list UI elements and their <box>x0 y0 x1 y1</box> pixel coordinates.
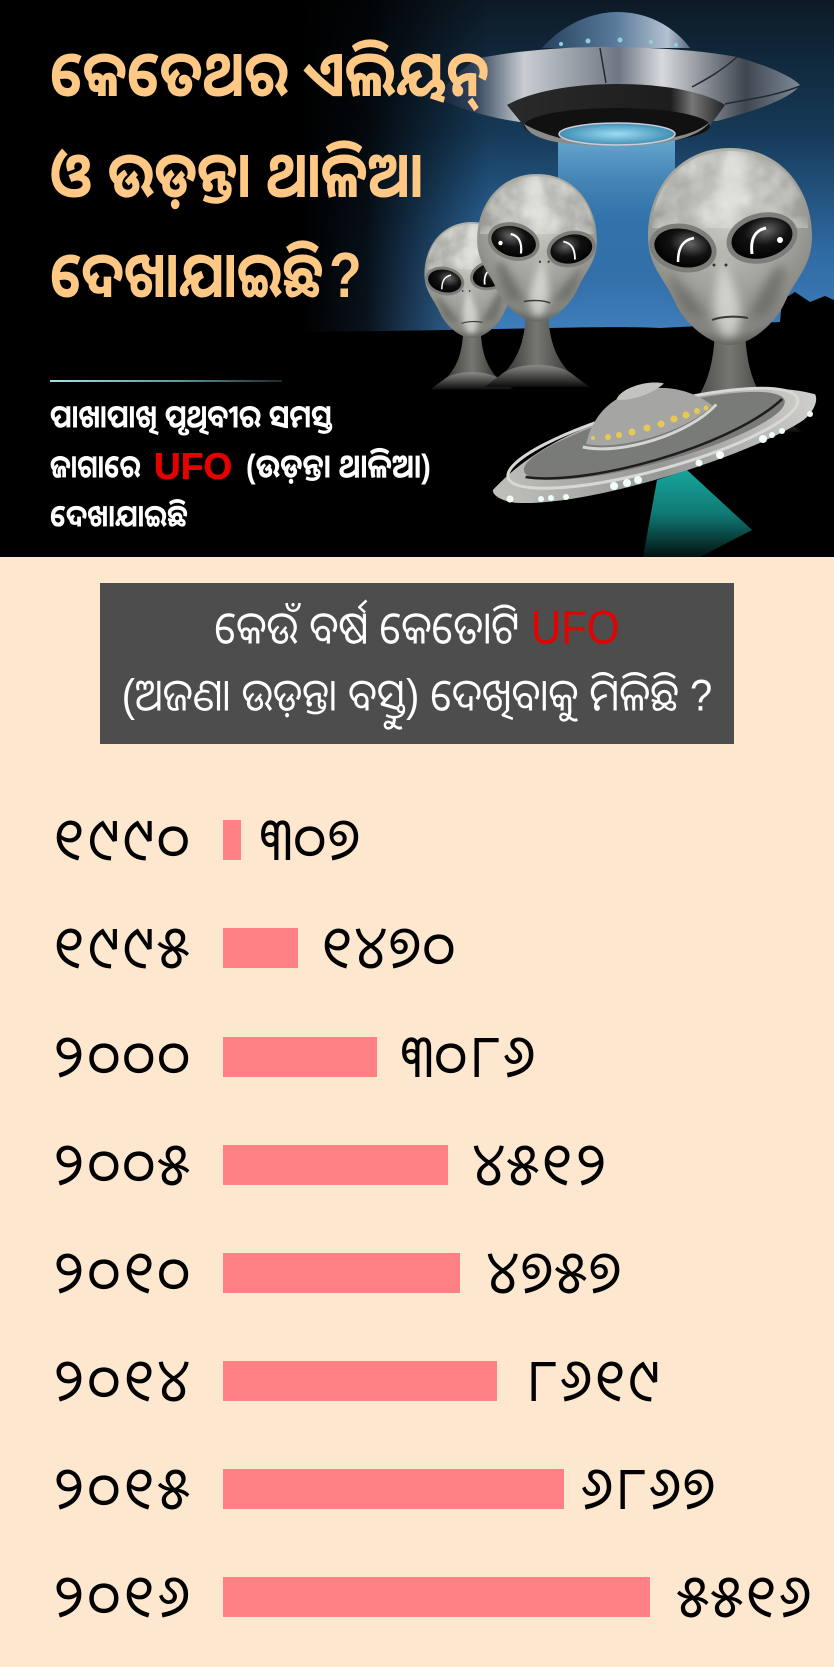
teal beam under lower saucer <box>643 470 752 557</box>
row 1990 <box>53 806 362 873</box>
row 2005: ୪୫୧୨ <box>473 1131 609 1198</box>
row 1990: ୧୯୯୦ <box>53 806 192 873</box>
question line 1: କେଉଁ ବର୍ଷ କେତୋଟି UFO <box>214 601 620 654</box>
row 2014: ୨୦୧୪ <box>53 1347 193 1414</box>
row 1995: ୧୪୭୦ <box>321 914 457 981</box>
row 2005 <box>53 1131 609 1198</box>
row 2010: ୨୦୧୦ <box>53 1239 193 1306</box>
question line 2: (ଅଜଣା ଉଡ଼ନ୍ତା ବସ୍ତୁ) ଦେଖିବାକୁ ମିଳିଛି ? <box>122 671 712 721</box>
row 2016 <box>53 1563 813 1630</box>
row 2016: ୨୦୧୬ <box>53 1563 193 1630</box>
row 1995 <box>53 914 457 981</box>
row 2010 <box>53 1239 623 1306</box>
row 2014: ୮୬୧୯ <box>526 1347 662 1414</box>
row 1995: ୧୯୯୫ <box>53 914 192 981</box>
subtitle line 3: ଦେଖାଯାଇଛି <box>50 499 188 533</box>
large alien <box>645 148 812 432</box>
row 2000: ୩୦୮୬ <box>401 1023 537 1090</box>
medium alien <box>477 174 599 387</box>
light beam from saucer <box>558 138 675 273</box>
row 2000 <box>53 1023 537 1090</box>
illustration: aliens and flying saucers <box>50 0 834 557</box>
row 2000: ୨୦୦୦ <box>53 1023 193 1090</box>
header panel <box>0 0 834 557</box>
row 2005: ୨୦୦୫ <box>53 1131 193 1198</box>
title line 3: ଦେଖାଯାଇଛି ? <box>50 240 362 312</box>
lower flying saucer <box>476 341 826 522</box>
bar chart <box>53 806 813 1630</box>
subtitle line 1: ପାଖାପାଖି ପୃଥିବୀର ସମସ୍ତ <box>50 399 333 434</box>
UFO label: UFO <box>154 446 232 487</box>
row 2016: ୫୫୧୬ <box>677 1563 813 1630</box>
question panel <box>100 583 734 744</box>
subtitle word: at places: ଜାଗାରେ <box>50 449 141 484</box>
title line 1: କେତେଥର ଏଲିୟନ୍ <box>50 39 489 111</box>
row 2015 <box>53 1455 717 1522</box>
row 2014 <box>53 1347 662 1414</box>
row 2010: ୪୭୫୭ <box>487 1239 623 1306</box>
subtitle bracket text: (ଉଡ଼ନ୍ତା ଥାଳିଆ) <box>246 449 431 485</box>
top flying saucer <box>437 12 800 146</box>
divider line <box>50 380 282 382</box>
title line 2: ଓ ଉଡ଼ନ୍ତା ଥାଳିଆ <box>50 140 423 212</box>
night sky <box>300 0 834 340</box>
row 2015: ୨୦୧୫ <box>53 1455 193 1522</box>
row 2015: ୬୮୬୭ <box>581 1455 717 1522</box>
row 1990: ୩୦୭ <box>260 806 362 873</box>
subtitle line 2 with UFO <box>50 446 431 487</box>
small alien <box>423 222 520 390</box>
